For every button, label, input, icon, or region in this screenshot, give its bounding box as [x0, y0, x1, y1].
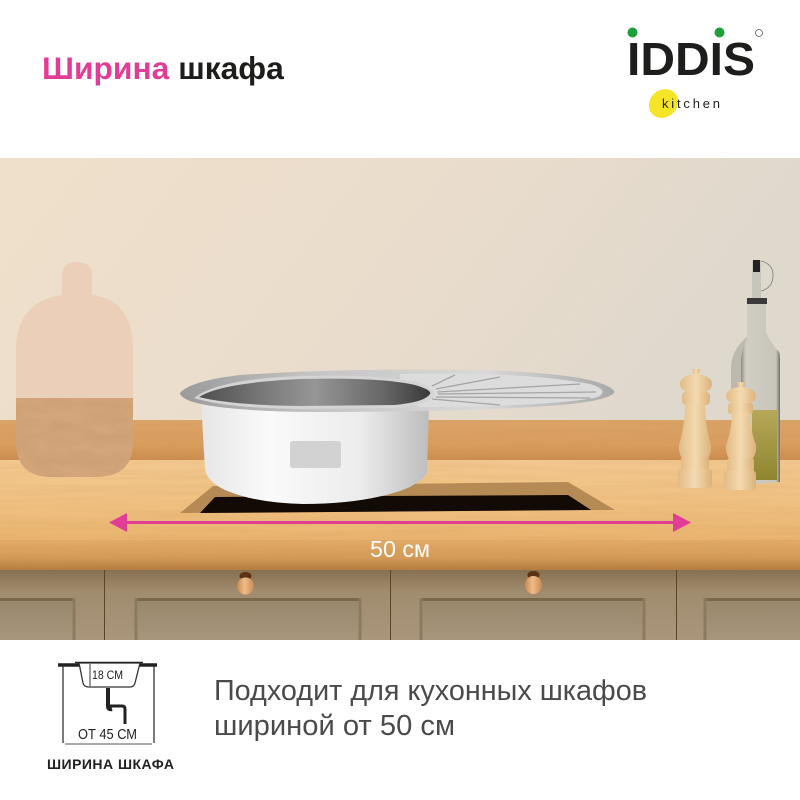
cutting board [16, 262, 133, 477]
width label: 50 см [370, 536, 430, 562]
diagram caption: ШИРИНА ШКАФА [47, 756, 174, 772]
sink diagram icon: ОТ 45 СМ [78, 727, 137, 743]
drainboard grooves [432, 375, 596, 405]
sink bowl [201, 400, 429, 504]
width arrow [109, 513, 691, 532]
description text: Подходит для кухонных шкафов [214, 675, 647, 707]
scene: kitchen background [0, 158, 800, 640]
logo: IDDIS kitchen: IDDIS [627, 33, 755, 85]
sink rim and drainboard [180, 370, 614, 412]
description text: шириной от 50 см [214, 710, 455, 742]
drainboard inner tray [400, 373, 602, 407]
sink diagram icon [58, 662, 157, 744]
pepper mill large [678, 369, 712, 488]
sink diagram icon: 18 СМ [92, 670, 123, 682]
cabinet knob left [237, 572, 254, 594]
sink basin opening [199, 379, 430, 406]
sink [180, 370, 614, 504]
pepper mill small [724, 382, 756, 490]
sink basin ring [194, 376, 435, 409]
cabinet knob right [525, 571, 542, 594]
countertop cut-out [180, 482, 615, 513]
title: Ширина шкафа [42, 50, 284, 86]
oil bottle [731, 260, 780, 484]
bowl label plate [290, 441, 341, 468]
logo: IDDIS kitchen [627, 28, 762, 124]
logo: IDDIS kitchen: kitchen [662, 96, 720, 111]
